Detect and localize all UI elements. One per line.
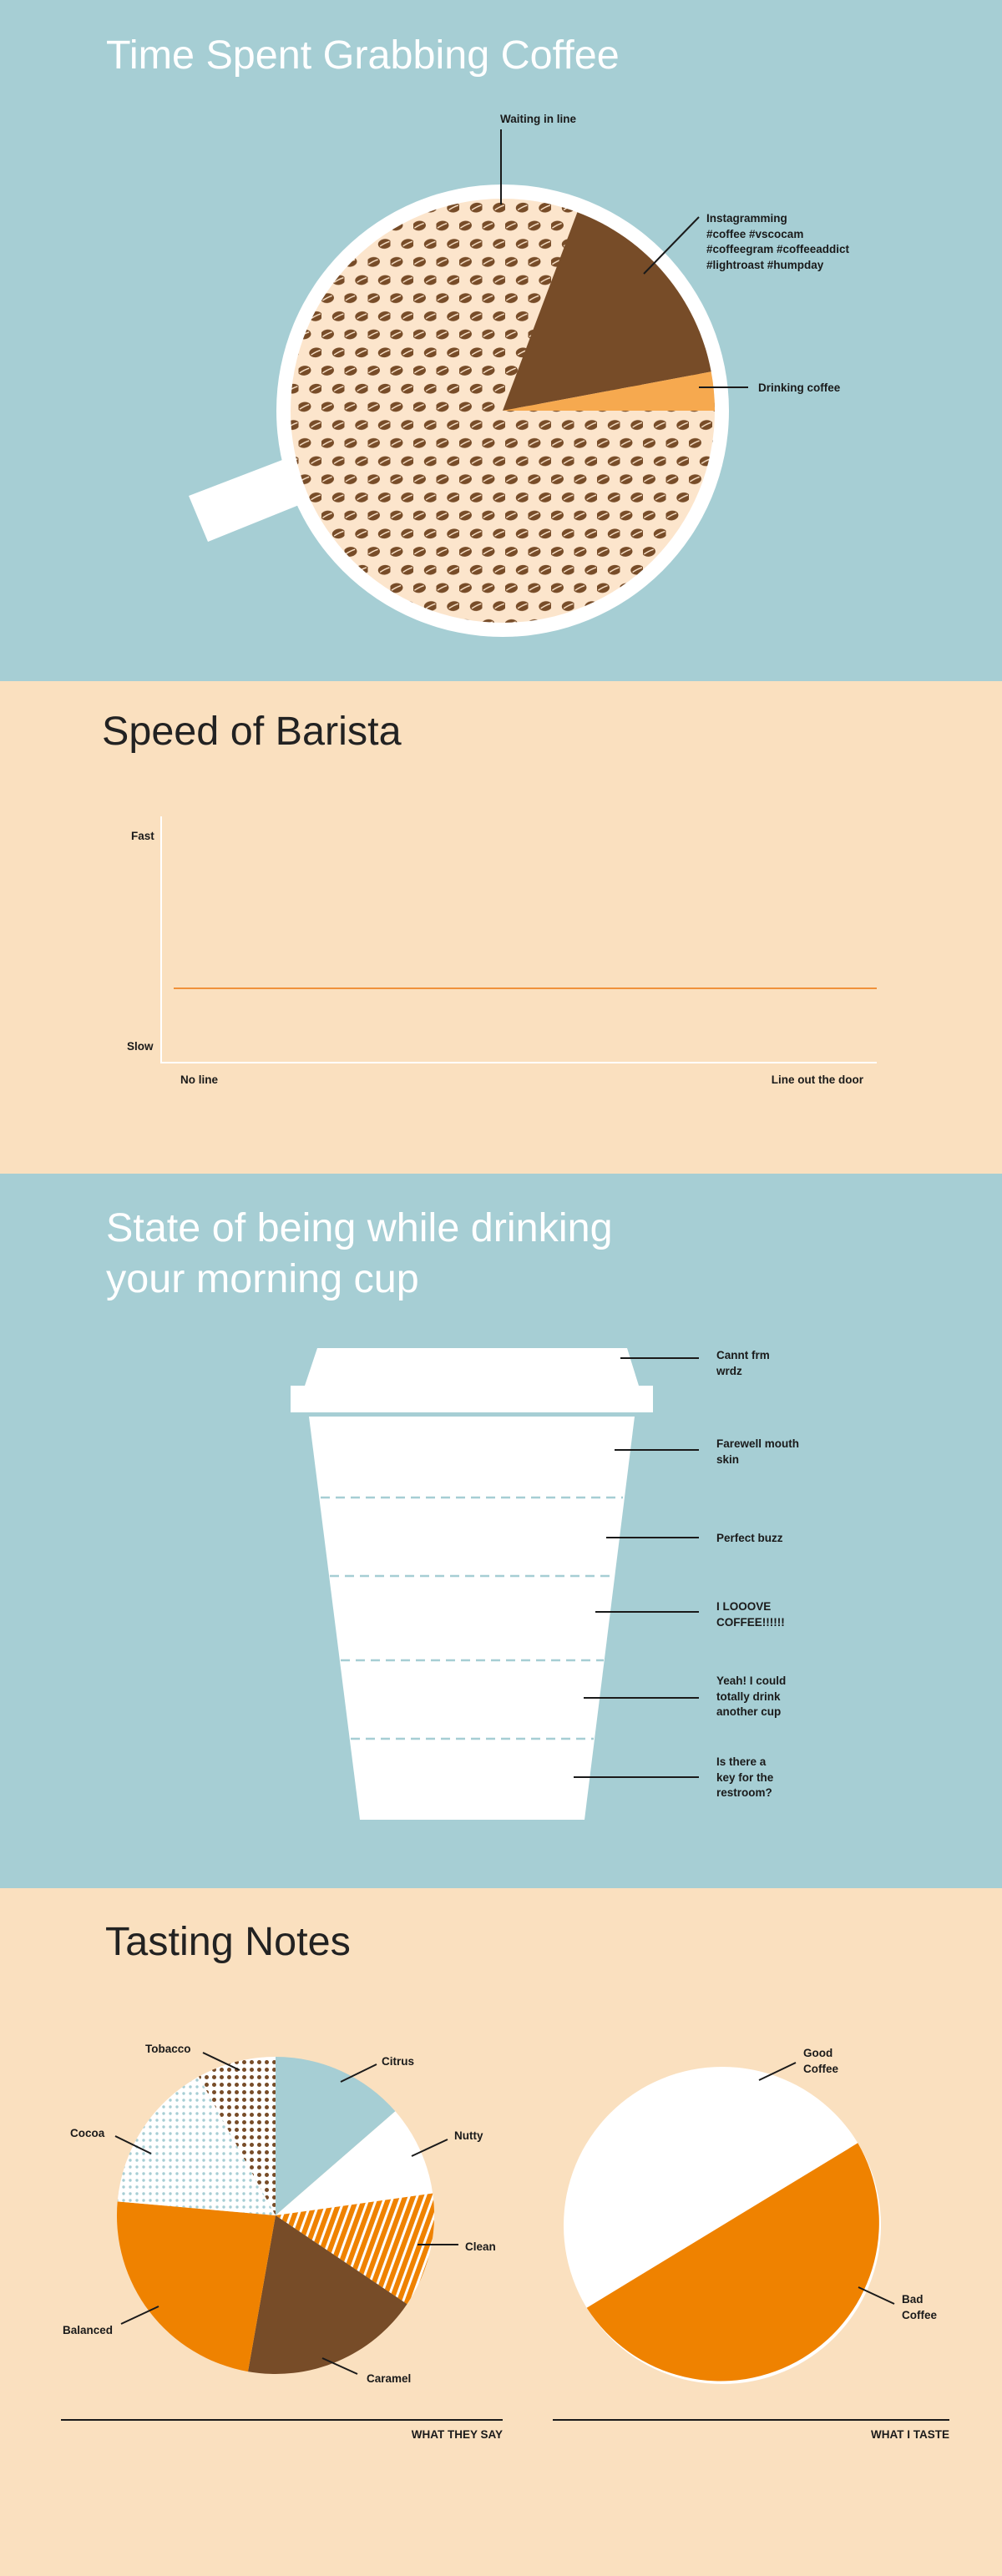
- label: Clean: Clean: [465, 2240, 496, 2253]
- label: Farewell mouth skin: [615, 1437, 799, 1466]
- label: Balanced: Balanced: [63, 2324, 113, 2336]
- label: I LOOOVE COFFEE: I LOOOVE: [716, 1600, 771, 1613]
- label: Cannt frm wrdz: Cannt frm: [716, 1349, 770, 1361]
- label: I LOOOVE COFFEE: COFFEE!!!!!!: [716, 1616, 785, 1629]
- label: Cocoa: [70, 2127, 151, 2154]
- label: I LOOOVE COFFEE: [595, 1600, 785, 1629]
- title: State of being while drinking your morning cup: State of being while drinking: [106, 1205, 613, 1250]
- pie chart: coffee time: [291, 199, 715, 623]
- label: Caramel: Caramel: [367, 2372, 411, 2385]
- label: Good Coffee: [759, 2047, 838, 2080]
- line chart: speed: Line out the door: [772, 1073, 864, 1086]
- label: Yeah I could totally drink another cup: another cup: [716, 1705, 781, 1718]
- panel: state of being: [0, 1174, 1002, 1888]
- label: Is there a key for the restroom: key for the: [716, 1771, 774, 1784]
- label: Farewell mouth skin: skin: [716, 1453, 739, 1466]
- label: Instagramming: Instagramming: [706, 212, 787, 225]
- label: Is there a key for the restroom: Is there a: [716, 1755, 767, 1768]
- icon: takeaway coffee cup: [291, 1348, 653, 1820]
- label: Drinking coffee: Drinking coffee: [758, 381, 841, 394]
- title: Speed of Barista: Speed of Barista: [102, 709, 402, 754]
- label: Nutty: [412, 2129, 483, 2156]
- label: Perfect buzz: Perfect buzz: [716, 1532, 783, 1544]
- label: Bad Coffee: [858, 2287, 937, 2321]
- label: Instagramming: #coffee #vscocam: [706, 228, 803, 240]
- title: State of being while drinking your morning cup: [106, 1205, 613, 1301]
- label: Nutty: Nutty: [454, 2129, 483, 2142]
- label: Waiting in line: [500, 113, 576, 205]
- label: Tobacco: [145, 2043, 240, 2070]
- line chart: speed: Slow: [127, 1040, 154, 1053]
- label: Farewell mouth skin: Farewell mouth: [716, 1437, 799, 1450]
- title: State of being while drinking your morning cup: your morning cup: [106, 1256, 419, 1301]
- label: Yeah I could totally drink another cup: [584, 1674, 786, 1718]
- label: Is there a key for the restroom: [574, 1755, 774, 1799]
- label: Instagramming: #lightroast #humpday: [706, 259, 824, 271]
- label: Bad Coffee: Bad: [902, 2293, 924, 2306]
- label: Good Coffee: Coffee: [803, 2063, 838, 2075]
- label: Good Coffee: Good: [803, 2047, 832, 2059]
- label: Caramel: [322, 2358, 411, 2385]
- caption: what they say: WHAT THEY SAY: [412, 2428, 503, 2441]
- label: Clean: [418, 2240, 496, 2253]
- line chart: speed: No line: [180, 1073, 218, 1086]
- label: Yeah I could totally drink another cup: Yeah! I could: [716, 1674, 786, 1687]
- label: Cocoa: Cocoa: [70, 2127, 105, 2139]
- label: Citrus: Citrus: [382, 2055, 414, 2068]
- icon: mug rim: [276, 184, 729, 637]
- line chart: speed: Fast: [131, 830, 154, 842]
- title: Tasting Notes: Tasting Notes: [105, 1919, 351, 1964]
- label: Waiting in line: Waiting in line: [500, 113, 576, 125]
- pie chart: what they say: [117, 2057, 434, 2374]
- title: Time Spent Grabbing Coffee: Time Spent Grabbing Coffee: [106, 33, 620, 78]
- icon: mug handle: [189, 460, 299, 542]
- label: Yeah I could totally drink another cup: totally drink: [716, 1690, 781, 1703]
- label: Cannt frm wrdz: [620, 1349, 770, 1377]
- label: Cannt frm wrdz: wrdz: [716, 1365, 742, 1377]
- panel: time spent grabbing coffee: [0, 0, 1002, 681]
- label: Citrus: [341, 2055, 414, 2082]
- panel: speed of barista: [0, 681, 1002, 1174]
- label: Instagramming: [644, 212, 850, 274]
- label: Is there a key for the restroom: restroom?: [716, 1786, 772, 1799]
- label: Tobacco: Tobacco: [145, 2043, 191, 2055]
- panel: tasting notes: [0, 1888, 1002, 2576]
- line chart: speed: [127, 816, 877, 1086]
- label: Bad Coffee: Coffee: [902, 2309, 937, 2321]
- label: Balanced: [63, 2306, 159, 2336]
- label: Instagramming: #coffeegram #coffeeaddict: [706, 243, 850, 255]
- caption: what I taste: WHAT I TASTE: [871, 2428, 949, 2441]
- pie chart: what I taste: [564, 2067, 881, 2384]
